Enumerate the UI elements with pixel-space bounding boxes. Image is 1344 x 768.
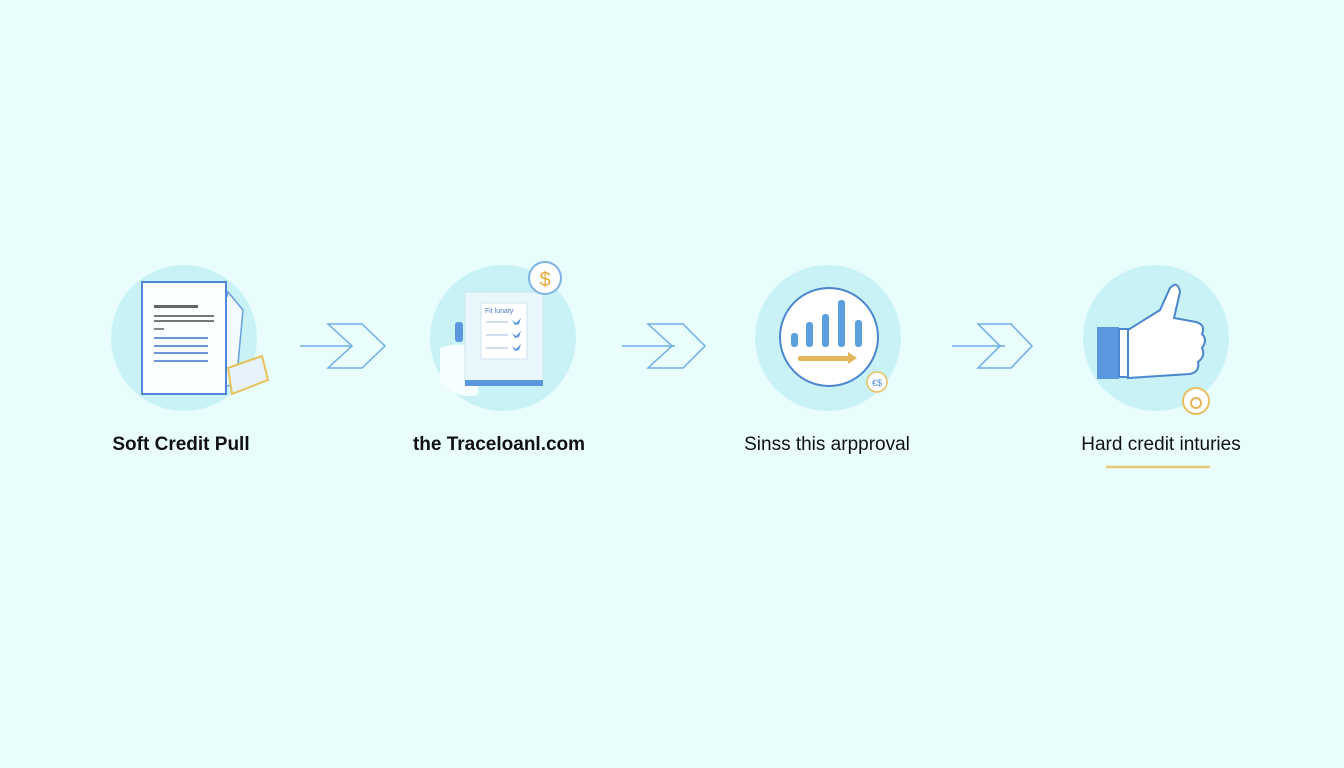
step 1 icon: document: [111, 265, 268, 411]
step 4 icon: thumbs up: [1083, 265, 1229, 414]
label: step 1: Soft Credit Pull: [112, 434, 250, 455]
arrow 1: [300, 324, 385, 368]
step 3 icon: bar chart: €$: [872, 378, 882, 388]
step 2 icon: tablet: Fit lunaty: [485, 308, 514, 315]
arrow 2: [622, 324, 705, 368]
step 2 icon: tablet: $: [539, 269, 551, 291]
label: step 2: the Traceloanl.com: [413, 434, 585, 455]
label: step 4: Hard credit inturies: [1081, 434, 1241, 455]
step 3 icon: bar chart: [755, 265, 901, 411]
label: step 3: Sinss this arpproval: [744, 434, 910, 455]
step 2 icon: tablet: [430, 262, 576, 411]
arrow 3: [952, 324, 1032, 368]
underline accent: [1106, 466, 1210, 468]
